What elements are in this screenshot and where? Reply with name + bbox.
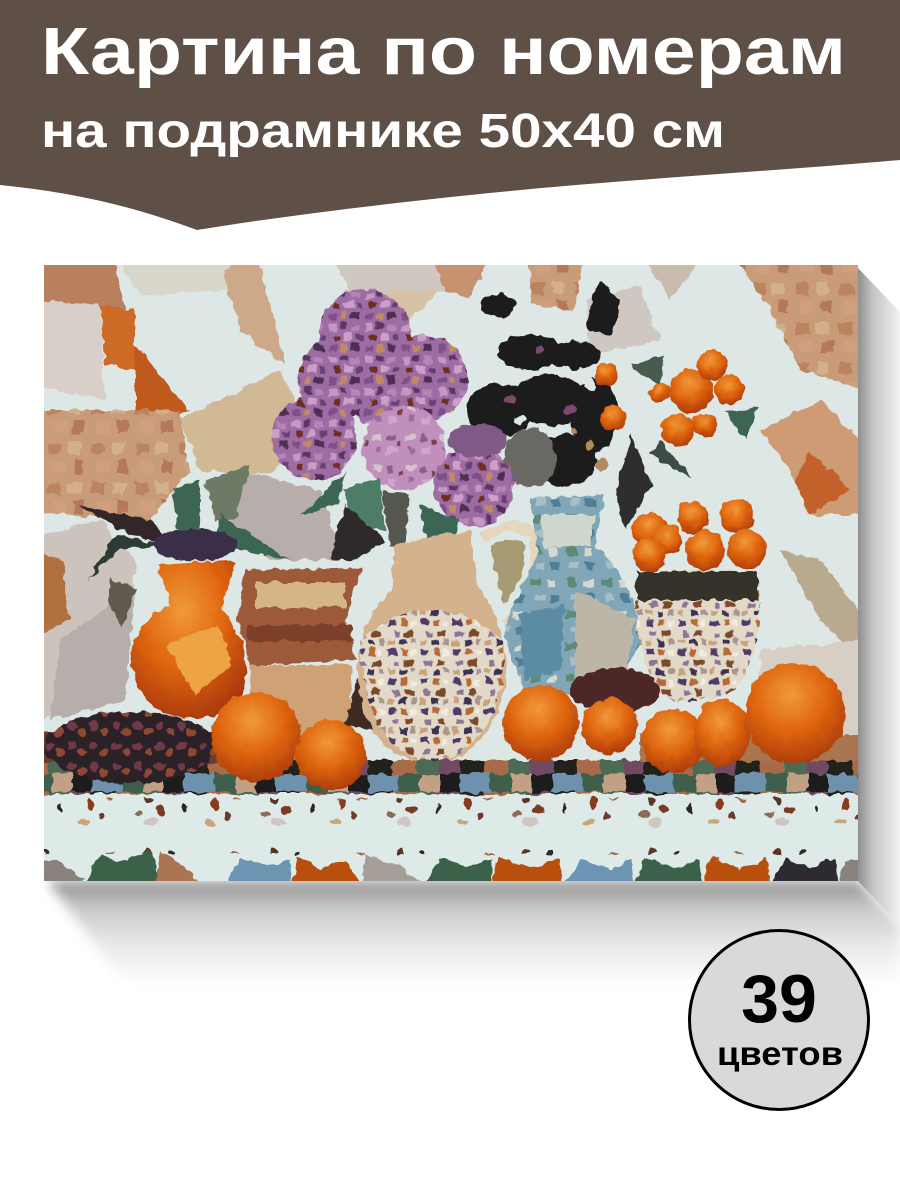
badge: colours count [690, 930, 868, 1110]
title: Картина по номерам [41, 14, 846, 89]
blue vase [505, 495, 640, 695]
lace tablecloth [44, 796, 858, 881]
subtitle: на подрамнике 50х40 см [41, 105, 725, 158]
bowl of oranges [632, 499, 767, 701]
wall background patches [30, 250, 880, 735]
grey leaf behind flowers [504, 428, 556, 488]
number of colours: 39 [741, 961, 817, 1037]
oranges on table [211, 663, 845, 790]
leaves left pitcher [78, 465, 290, 628]
brown jug [238, 568, 375, 735]
leaves centre [300, 355, 758, 562]
colours label: цветов [717, 1035, 843, 1072]
grapes [45, 668, 660, 783]
tabletop [20, 733, 880, 794]
small oranges on sprig [594, 350, 744, 447]
hydrangea flowers [272, 289, 514, 526]
large white pitcher [358, 526, 536, 765]
dark foliage sprays [466, 280, 620, 486]
panel: painting [44, 265, 858, 881]
header banner [0, 0, 900, 230]
orange pitcher [131, 560, 246, 718]
canvas drop shadow [48, 268, 900, 985]
